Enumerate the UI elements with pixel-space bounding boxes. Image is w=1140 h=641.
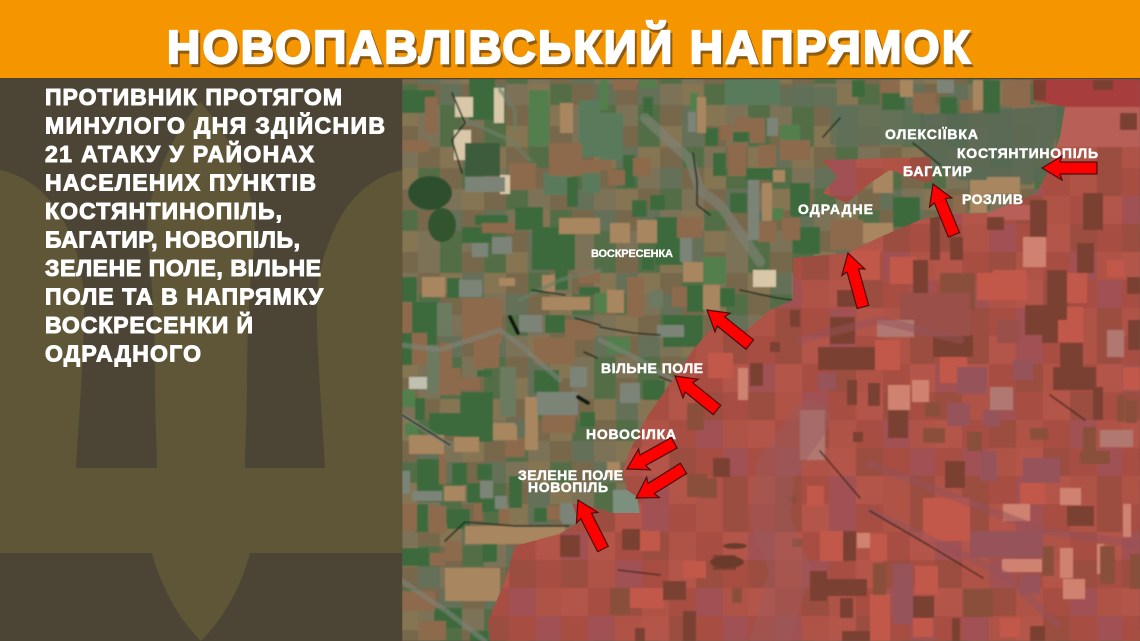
summary text block: [45, 84, 385, 366]
summary text block: ПОЛЕ ТА В НАПРЯМКУ: [45, 284, 324, 310]
trident emblem watermark: [0, 102, 402, 641]
label: Воскресенка: ВОСКРЕСЕНКА: [591, 248, 673, 260]
arrow: towards Одрадне: [840, 252, 870, 310]
arrow: towards Новосілка: [626, 436, 678, 470]
label: Новосілка: НОВОСІЛКА: [586, 426, 676, 442]
satellite map: [402, 79, 1140, 641]
summary text block: НАСЕЛЕНИХ ПУНКТІВ: [45, 170, 316, 196]
summary text block: ОДРАДНОГО: [45, 340, 201, 366]
label: Вільне Поле: ВІЛЬНЕ ПОЛЕ: [601, 360, 703, 376]
arrow: towards Новопіль: [576, 499, 609, 552]
summary text block: 21 АТАКУ У РАЙОНАХ: [45, 140, 315, 167]
map: unoccupied farmland: [402, 79, 1140, 641]
arrow: towards Воскресенка: [706, 309, 754, 350]
label: Розлив: РОЗЛИВ: [962, 191, 1023, 207]
summary text block: БАГАТИР, НОВОПІЛЬ,: [45, 226, 300, 252]
title: НОВОПАВЛІВСЬКИЙ НАПРЯМОК: [169, 24, 973, 76]
label: Костянтинопіль: КОСТЯНТИНОПІЛЬ: [957, 145, 1098, 161]
label: Олексіївка: ОЛЕКСІЇВКА: [885, 126, 978, 142]
arrow: towards Багатир: [928, 183, 960, 238]
map: occupied territory overlay: [488, 79, 1140, 641]
arrow: towards Зелене Поле: [635, 462, 688, 499]
summary text block: ПРОТИВНИК ПРОТЯГОМ: [45, 84, 342, 110]
summary text block: КОСТЯНТИНОПІЛЬ,: [45, 198, 282, 224]
arrow: towards Вільне Поле: [674, 375, 722, 416]
label: Багатир: БАГАТИР: [903, 163, 972, 179]
title: НОВОПАВЛІВСЬКИЙ НАПРЯМОК: [167, 21, 971, 73]
summary text block: МИНУЛОГО ДНЯ ЗДІЙСНИВ: [45, 112, 385, 138]
summary text block: ЗЕЛЕНЕ ПОЛЕ, ВІЛЬНЕ: [45, 255, 321, 281]
left panel background: [0, 78, 402, 641]
arrow: towards Костянтинопіль: [1042, 156, 1097, 180]
label: Новопіль: НОВОПІЛЬ: [528, 479, 608, 495]
header bar: [0, 0, 1140, 78]
label: Одрадне: ОДРАДНЕ: [798, 201, 873, 217]
summary text block: ВОСКРЕСЕНКИ Й: [45, 311, 253, 338]
label: Зелене Поле: ЗЕЛЕНЕ ПОЛЕ: [518, 467, 623, 483]
